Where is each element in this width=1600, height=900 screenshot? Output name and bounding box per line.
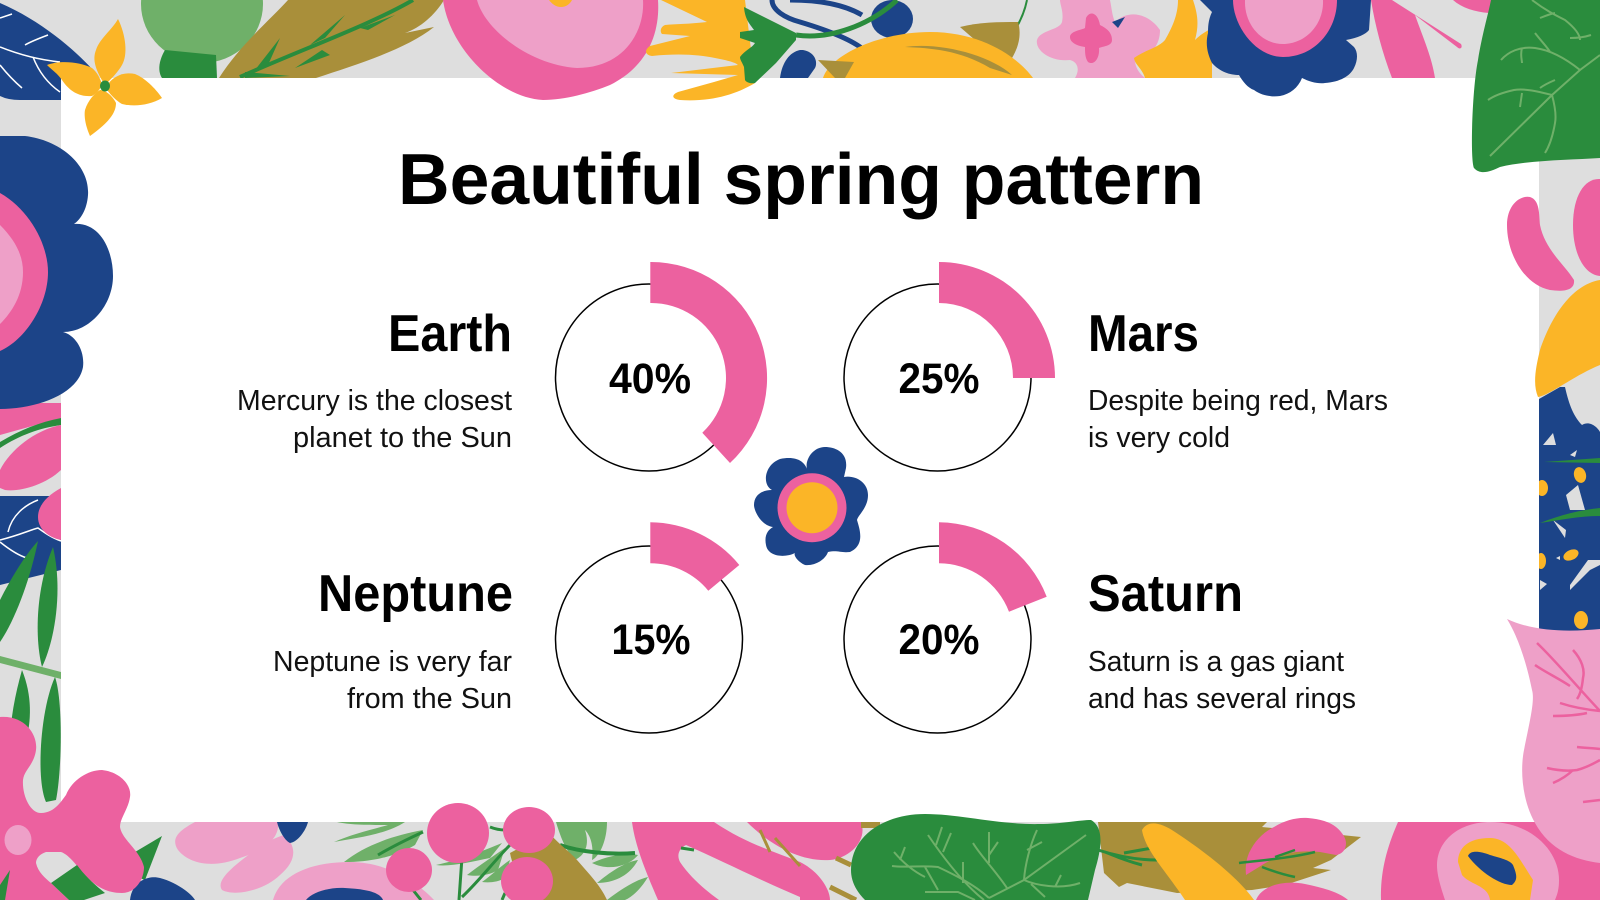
icon: pink petals bottom xyxy=(1239,818,1348,900)
icon: yellow leaf bottom xyxy=(1142,823,1254,900)
donut chart: 15%: 15% xyxy=(612,616,690,664)
icon: pink berries xyxy=(386,803,555,900)
donut chart: 20% xyxy=(844,522,1047,733)
panel: Earth xyxy=(237,262,767,471)
title: Beautiful spring pattern xyxy=(398,140,1204,220)
white content panel xyxy=(61,78,1539,822)
donut chart: 40% xyxy=(556,262,767,471)
description: Neptune: from the Sun xyxy=(347,683,512,715)
description: Saturn: Saturn is a gas giant xyxy=(1088,646,1344,678)
heading: Earth: Earth xyxy=(388,305,512,363)
panel: Saturn xyxy=(844,522,1356,733)
description: Saturn xyxy=(1088,646,1356,715)
description: Neptune xyxy=(273,646,512,715)
left floral border (behind panel) xyxy=(0,403,61,802)
icon: navy flower left edge xyxy=(0,136,113,409)
icon: yellow petal right edge xyxy=(1535,280,1600,397)
icon: big pink tulip top xyxy=(443,0,658,100)
icon: navy flower top right xyxy=(1200,0,1371,96)
description: Mars: is very cold xyxy=(1088,422,1230,454)
heading: Neptune: Neptune xyxy=(318,565,513,623)
description: Mars xyxy=(1088,385,1388,454)
description: Saturn: and has several rings xyxy=(1088,683,1356,715)
icon: green leaf top right xyxy=(1472,0,1600,172)
donut chart: 25%: 25% xyxy=(898,355,980,403)
top floral border (behind panel) xyxy=(0,0,1499,100)
bottom floral border (behind panel) xyxy=(120,822,1600,900)
icon: center flower xyxy=(754,447,868,565)
heading: Mars: Mars xyxy=(1088,305,1199,363)
description: Earth: planet to the Sun xyxy=(293,422,512,454)
icon: yellow and green flower top xyxy=(646,0,796,100)
description: Earth xyxy=(237,385,512,454)
description: Neptune: Neptune is very far xyxy=(273,646,512,678)
icon: pink petals right edge xyxy=(1507,179,1600,291)
icon: green leaf bottom xyxy=(851,814,1100,900)
description: Mars: Despite being red, Mars xyxy=(1088,385,1388,417)
donut chart: 20%: 20% xyxy=(898,616,980,664)
heading: Saturn: Saturn xyxy=(1088,565,1243,623)
donut chart: 25% xyxy=(844,262,1055,471)
panel: Mars xyxy=(844,262,1388,471)
description: Earth: Mercury is the closest xyxy=(237,385,512,417)
donut chart: 15% xyxy=(556,522,742,733)
donut chart: 40%: 40% xyxy=(609,355,691,403)
panel: Neptune xyxy=(273,522,742,733)
right floral border (behind panel) xyxy=(1536,387,1600,632)
icon: pink leaf lower right xyxy=(1507,619,1600,863)
icon: pink blossom lower left xyxy=(0,717,144,900)
icon: yellow four-petal flower xyxy=(47,19,162,136)
